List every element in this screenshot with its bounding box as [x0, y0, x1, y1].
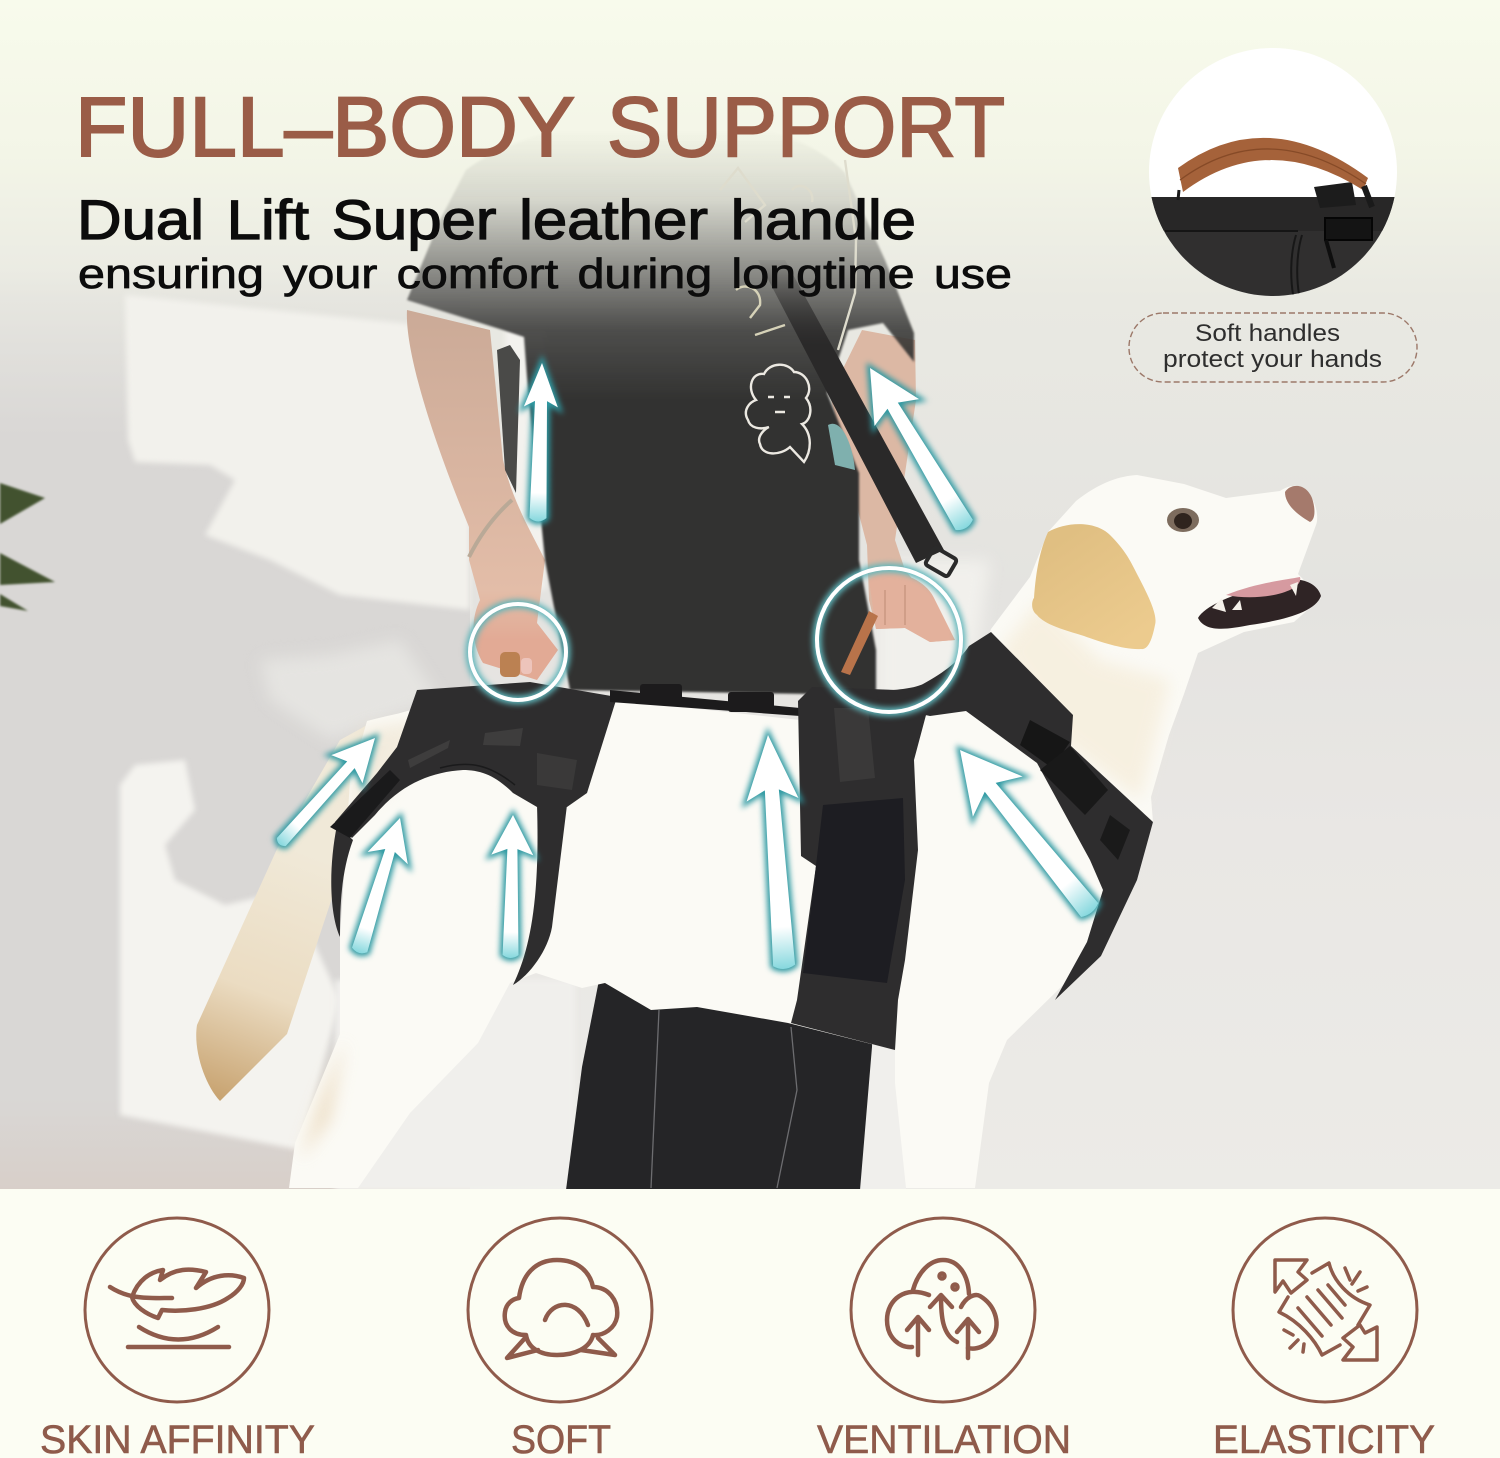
title	[75, 80, 1005, 174]
title: SUPPORT	[607, 80, 1005, 174]
dog head details	[1032, 486, 1321, 649]
inset: leather handle close-up	[1149, 48, 1397, 296]
dog fur shading	[300, 600, 1170, 1160]
leather handle in right hand	[841, 611, 878, 675]
callout: soft handles: Soft handles	[1195, 320, 1340, 347]
plant leaves	[0, 483, 55, 611]
shoulder strap piece	[876, 632, 1153, 1000]
feature: elasticity	[1213, 1218, 1435, 1458]
title: FULL–BODY	[75, 80, 575, 174]
shoulder strap	[758, 260, 957, 577]
side-release buckle	[1020, 720, 1070, 768]
arrow: rear thigh right	[490, 815, 534, 958]
subtitle: Dual Lift Super leather handle	[77, 188, 916, 251]
dog tail	[196, 718, 390, 1101]
arrow: rear thigh left	[339, 812, 420, 959]
feature band	[0, 1189, 1500, 1458]
ear	[1032, 524, 1156, 649]
tongue	[1226, 577, 1300, 597]
dog body	[289, 475, 1321, 1188]
person: legs	[566, 975, 875, 1190]
person: left arm and hand	[407, 310, 558, 680]
icon: cotton boll	[505, 1260, 617, 1358]
icon: cotton with arrows	[887, 1260, 996, 1358]
harness: connecting belt with buckles	[610, 684, 800, 716]
harness: front vest	[791, 632, 1153, 1050]
feature: ventilation	[817, 1218, 1071, 1458]
harness: rear section	[330, 682, 617, 985]
mouth	[1198, 580, 1321, 629]
arrow: dog rump	[264, 724, 391, 858]
arrow: right arm	[848, 355, 988, 541]
arrow: left arm	[521, 363, 559, 522]
teeth	[1212, 582, 1298, 612]
arrow: chest	[935, 730, 1116, 933]
shirt doodles	[720, 160, 856, 470]
arrow: mid body	[742, 733, 810, 971]
icon: feather	[110, 1270, 244, 1347]
feature: skin affinity	[40, 1218, 315, 1458]
eye	[1167, 508, 1199, 532]
icon: stretch fabric	[1275, 1260, 1377, 1360]
highlight ring: left hand	[470, 604, 566, 700]
tagline: ensuring your comfort during longtime use	[78, 250, 1012, 297]
person: shirt	[407, 118, 914, 695]
person: right arm and hand	[830, 330, 955, 642]
highlight ring: right hand	[817, 568, 961, 712]
callout: soft handles	[1129, 313, 1417, 382]
feature: soft	[468, 1218, 652, 1458]
nose	[1285, 486, 1314, 522]
callout: soft handles: protect your hands	[1163, 346, 1382, 373]
